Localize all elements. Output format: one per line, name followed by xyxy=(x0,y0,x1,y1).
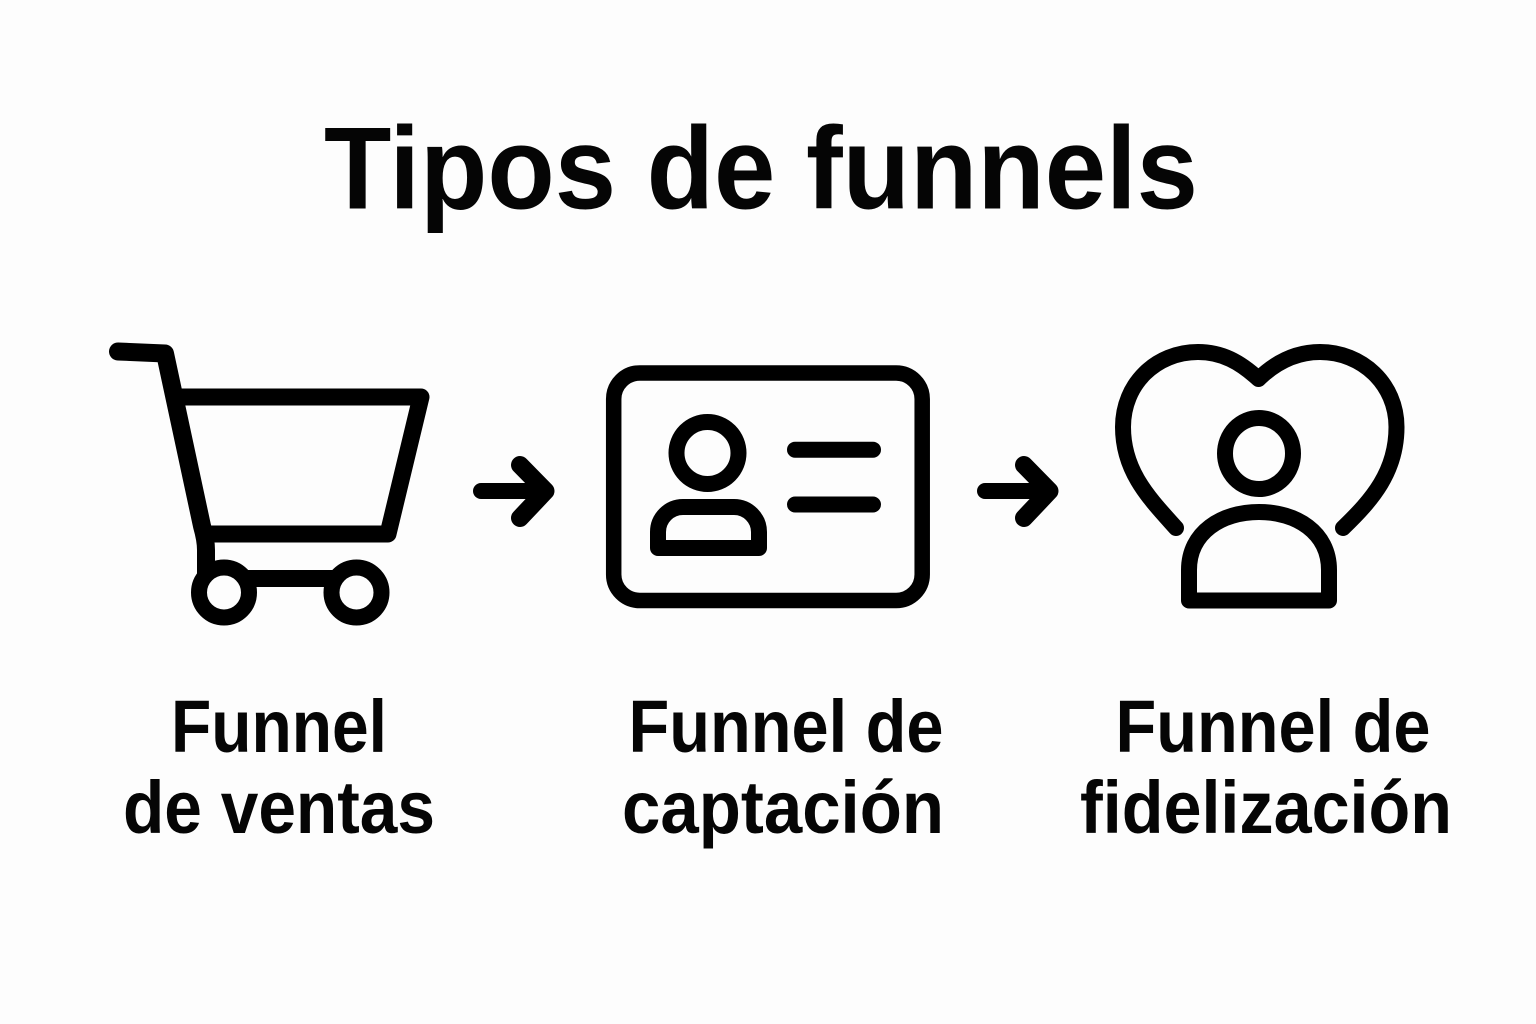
arrow: ventas to captación xyxy=(481,465,546,518)
label: funnel de captación xyxy=(622,685,944,849)
icon: contact card xyxy=(614,373,922,600)
label: funnel de captación: Funnel de xyxy=(628,685,944,768)
label: funnel de fidelización: Funnel de xyxy=(1116,685,1430,768)
label: funnel de fidelización: fidelización xyxy=(1080,766,1452,849)
label: funnel de ventas: Funnel xyxy=(171,685,387,768)
label: funnel de captación: captación xyxy=(622,766,944,849)
arrow: captación to fidelización xyxy=(985,465,1050,518)
label: funnel de ventas xyxy=(123,685,435,849)
icon: shopping cart xyxy=(118,352,421,618)
icon: heart with person xyxy=(1123,352,1396,600)
title: Tipos de funnels xyxy=(324,102,1198,234)
label: funnel de ventas: de ventas xyxy=(123,766,435,849)
label: funnel de fidelización xyxy=(1080,685,1452,849)
